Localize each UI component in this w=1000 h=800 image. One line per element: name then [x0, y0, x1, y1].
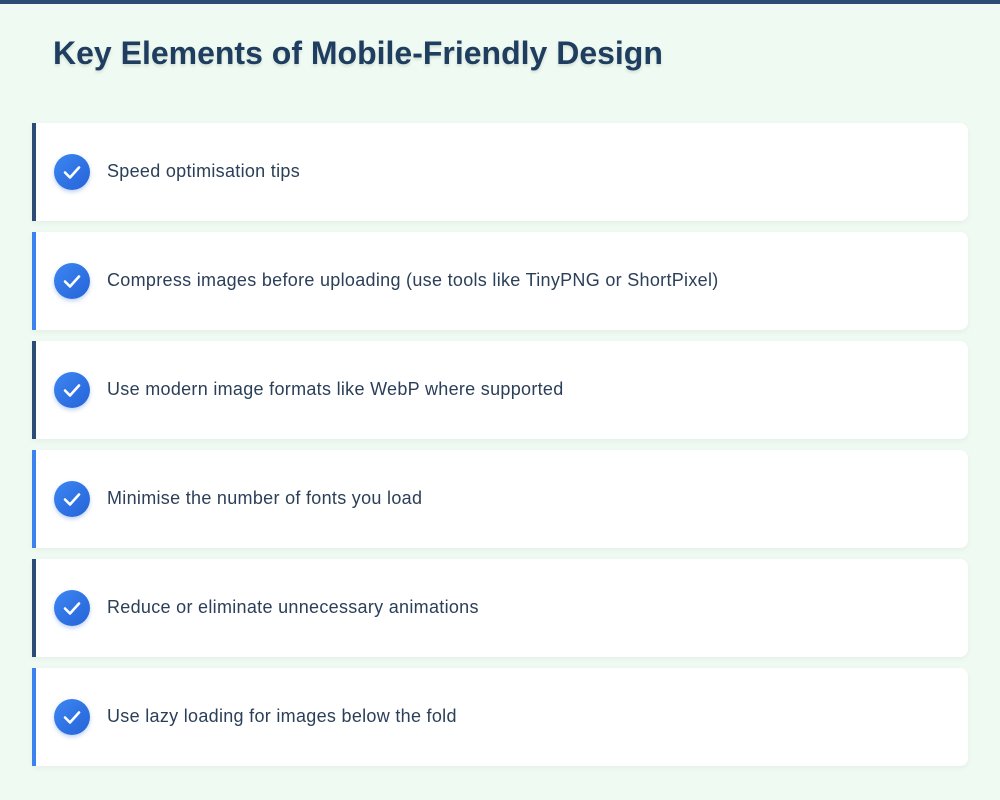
text: Use lazy loading for images below the fold — [107, 706, 457, 726]
icon: check — [54, 154, 90, 190]
text: Minimise the number of fonts you load — [107, 488, 422, 508]
card: lazy loading — [32, 668, 968, 766]
card: compress images — [32, 232, 968, 330]
icon: check — [54, 263, 90, 299]
icon: check — [54, 590, 90, 626]
card: speed optimisation tips — [32, 123, 968, 221]
text: Use modern image formats like WebP where supported — [107, 379, 564, 399]
card: animations — [32, 559, 968, 657]
icon: check — [54, 481, 90, 517]
icon: check — [54, 699, 90, 735]
card: modern formats — [32, 341, 968, 439]
text: Speed optimisation tips — [107, 161, 300, 181]
title: Key Elements of Mobile-Friendly Design — [53, 35, 663, 71]
icon: check — [54, 372, 90, 408]
card: fonts — [32, 450, 968, 548]
text: Reduce or eliminate unnecessary animations — [107, 597, 479, 617]
text: Compress images before uploading (use tools like TinyPNG or ShortPixel) — [107, 270, 719, 290]
